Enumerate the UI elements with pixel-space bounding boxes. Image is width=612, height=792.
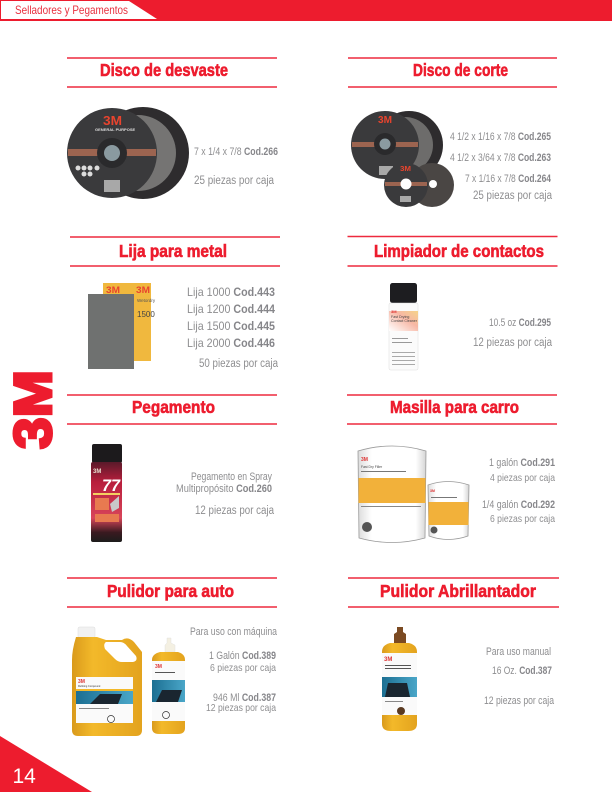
heading: Masilla para carro: [390, 397, 519, 417]
icon: sandpaper sheets: 1500: [137, 310, 155, 319]
icon: sandpaper sheets: 3M: [136, 285, 150, 295]
panel: Masilla para carro: [347, 395, 557, 542]
usage text: Para uso manual: [486, 646, 551, 658]
spec text: 1/4 galón Cod.292: [482, 499, 555, 511]
usage text: Para uso con máquina: [190, 626, 278, 638]
icon: cutting discs: 3M: [378, 115, 392, 126]
icon: sandpaper sheets: [88, 283, 156, 369]
icon: Super 77 spray can: [91, 444, 122, 542]
spec text: 7 x 1/4 x 7/8 Cod.266: [194, 146, 278, 158]
heading: Disco de corte: [413, 60, 508, 80]
section title: Selladores y Pegamentos: [15, 3, 128, 17]
spec text: Multipropósito Cod.260: [176, 483, 272, 495]
spec text: Pegamento en Spray: [191, 471, 272, 483]
icon: polish bottle: 3M: [155, 664, 162, 670]
panel: Lija para metal: [70, 237, 280, 370]
icon: polish bottle: [382, 627, 417, 731]
spec text: 1 galón Cod.291: [489, 457, 555, 469]
icon: sandpaper sheets: Wetordry: [137, 298, 156, 303]
panel: Disco de desvaste: [67, 58, 278, 199]
icon: spray can: Contact Cleaner: [391, 319, 418, 323]
spec text: Lija 1000 Cod.443: [187, 285, 275, 299]
icon: gallon jug: 3M: [78, 679, 85, 685]
icon: grinding discs: 3M: [103, 113, 122, 128]
panel: Disco de corte: [348, 58, 557, 207]
heading: Lija para metal: [119, 241, 227, 261]
page number corner: [0, 736, 92, 792]
spec text: Lija 2000 Cod.446: [187, 336, 275, 350]
panel: Pulidor Abrillantador: [348, 578, 559, 731]
spec text: 16 Oz. Cod.387: [492, 665, 552, 677]
heading: Pegamento: [132, 397, 215, 417]
icon: cutting discs: [351, 111, 454, 207]
icon: Super 77 spray can: 77: [102, 476, 121, 495]
spec text: 10.5 oz Cod.295: [489, 317, 551, 329]
icon: grinding discs: [67, 107, 189, 199]
spec text: Lija 1200 Cod.444: [187, 302, 275, 316]
icon: polish bottle: 3M: [384, 657, 392, 663]
icon: spray can: 3M: [391, 309, 397, 314]
header bar: [0, 0, 612, 21]
spec text: 7 x 1/16 x 7/8 Cod.264: [465, 173, 552, 185]
pack text: 12 piezas por caja: [484, 695, 555, 707]
heading: Limpiador de contactos: [374, 241, 544, 261]
panel: Pegamento: [67, 395, 277, 542]
spec text: 946 Ml Cod.387: [213, 692, 276, 704]
spec text: 4 1/2 x 1/16 x 7/8 Cod.265: [450, 131, 551, 143]
heading: Pulidor para auto: [107, 581, 234, 601]
spec text: 1 Galón Cod.389: [209, 650, 276, 662]
icon: polish bottle: [152, 638, 185, 734]
icon: filler cans: Fast Dry Filler: [361, 465, 383, 469]
icon: sandpaper sheets: 3M: [106, 285, 120, 295]
page number: 14: [12, 765, 36, 788]
pack text: 12 piezas por caja: [206, 702, 276, 714]
heading: Disco de desvaste: [100, 60, 228, 80]
icon: grinding discs: GENERAL PURPOSE: [95, 127, 135, 132]
icon: spray can: Fast Drying: [391, 315, 409, 319]
icon: Super 77 spray can: 3M: [93, 469, 101, 475]
icon: filler cans: 3M: [361, 457, 368, 463]
icon: filler cans: 3M: [430, 489, 435, 493]
pack text: 50 piezas por caja: [199, 358, 279, 370]
pack text: 25 piezas por caja: [194, 175, 275, 187]
icon: gallon jug: [72, 627, 142, 736]
pack text: 25 piezas por caja: [473, 190, 553, 202]
pack text: 4 piezas por caja: [490, 472, 555, 484]
icon: cutting discs: 3M: [400, 164, 411, 173]
spec text: Lija 1500 Cod.445: [187, 319, 275, 333]
pack text: 12 piezas por caja: [195, 505, 275, 517]
icon: gallon jug: Rubbing Compound: [78, 685, 101, 688]
side logo: 3M: 3M: [4, 370, 63, 449]
pack text: 6 piezas por caja: [490, 513, 555, 525]
icon: filler cans: [358, 446, 469, 542]
icon: spray can: [389, 283, 418, 370]
pack text: 6 piezas por caja: [210, 662, 276, 674]
pack text: 12 piezas por caja: [473, 337, 553, 349]
heading: Pulidor Abrillantador: [380, 581, 536, 601]
panel: Pulidor para auto: [67, 578, 278, 736]
spec text: 4 1/2 x 3/64 x 7/8 Cod.263: [450, 152, 551, 164]
panel: Limpiador de contactos: [348, 236, 558, 370]
